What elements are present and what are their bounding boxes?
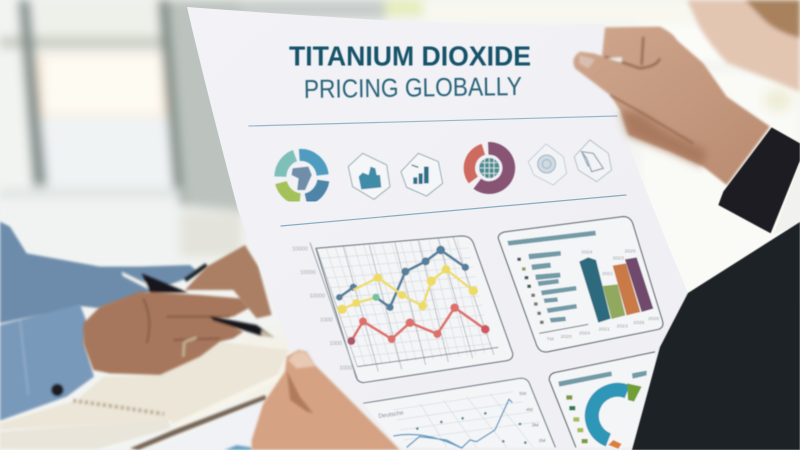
icon: dial hexagon xyxy=(528,144,567,185)
axis labels: 1000 xyxy=(320,317,333,323)
axis xyxy=(539,324,588,333)
right hand gripping paper xyxy=(573,27,770,185)
notebook on the desk xyxy=(0,342,288,449)
title xyxy=(289,40,531,104)
panel: bar chart: 2024 xyxy=(579,331,590,337)
shirt cuff and suit sleeve xyxy=(718,127,800,235)
axis labels: 10000 xyxy=(309,294,325,300)
legend markers xyxy=(517,258,544,324)
axis labels: 1000 xyxy=(339,365,352,371)
panel: bar chart: 2021 xyxy=(599,327,610,333)
subtitle: PRICING GLOBALLY xyxy=(304,71,522,104)
suit jacket xyxy=(632,222,800,450)
person on the left: blue shirt sleeve xyxy=(0,222,207,421)
icon: tool hexagon xyxy=(574,140,612,182)
blue series xyxy=(336,246,469,311)
icon: factory hexagon xyxy=(348,153,390,199)
axis labels: 10000 xyxy=(292,247,308,253)
left hands holding a pen xyxy=(83,245,274,375)
printed paper sheet xyxy=(187,7,688,450)
panel: bar chart: 2023 xyxy=(617,323,628,329)
yellow series xyxy=(337,265,478,314)
axis labels: 10000 xyxy=(300,270,316,276)
panel: lower line chart: 5M xyxy=(519,391,526,397)
red series xyxy=(347,303,490,345)
chart panels xyxy=(292,217,663,449)
title: TITANIUM DIOXIDE xyxy=(289,40,531,72)
panel: bar chart: 2026 xyxy=(648,316,659,322)
icon: quarter donut with map xyxy=(280,155,323,199)
axis labels xyxy=(292,247,352,371)
icon row xyxy=(280,140,612,199)
panel: lower line chart: 2M xyxy=(539,438,546,444)
panel: bar chart: 2024 xyxy=(581,249,593,255)
desk edge and second sheet xyxy=(130,395,267,450)
panel: bar chart xyxy=(498,217,663,352)
panel: lower line chart: 4M xyxy=(526,407,533,413)
panel heading placeholder xyxy=(507,231,596,246)
panel: bar chart: TM xyxy=(547,337,554,343)
panel: bar chart: 2025 xyxy=(633,320,645,326)
line chart grid xyxy=(310,237,498,378)
panel: bar chart: 2025 xyxy=(625,249,636,255)
bars xyxy=(579,257,611,323)
panel: lower line chart: 3M xyxy=(532,423,539,429)
panel: bar chart: 2023 xyxy=(613,256,624,262)
icon: bars hexagon xyxy=(401,153,443,196)
panel: bar chart: 2020 xyxy=(561,334,572,340)
person on the right: blurred head xyxy=(687,0,800,92)
icon: donut with globe xyxy=(469,148,509,188)
panel: line chart xyxy=(292,236,513,382)
panel: bar chart: 2021 xyxy=(602,271,613,277)
divider lines xyxy=(249,116,626,226)
legend rows xyxy=(528,251,577,323)
panel: lower line chart: Deutsche xyxy=(378,410,405,420)
panel: lower line chart xyxy=(363,378,555,448)
lower hand holding paper xyxy=(252,350,400,450)
panel: donut chart xyxy=(549,352,655,449)
axis labels: 1000 xyxy=(329,341,342,347)
